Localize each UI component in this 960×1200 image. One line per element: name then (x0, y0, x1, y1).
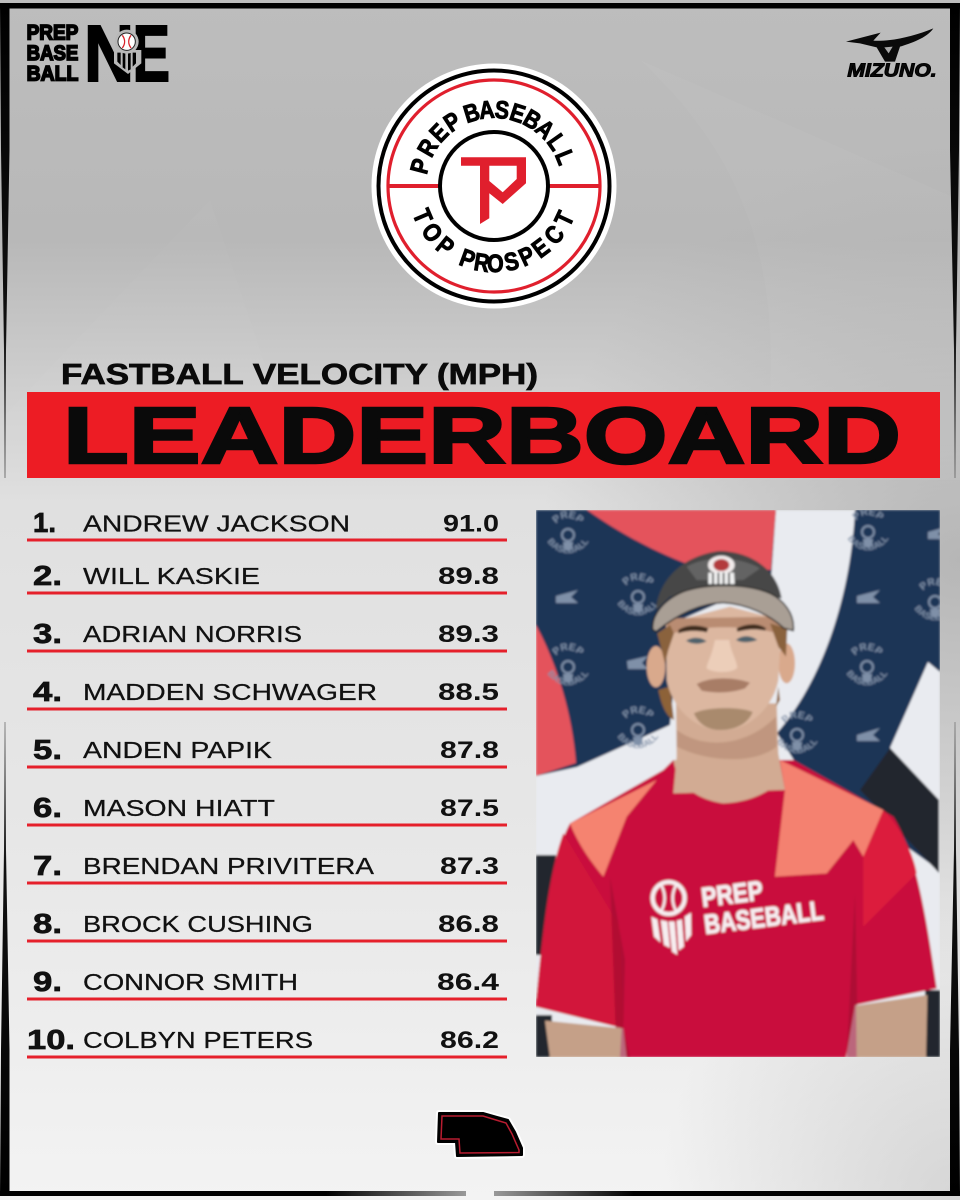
backdrop watermarks: BASEBALL (847, 534, 890, 552)
logo: Prep Baseball NE: E (133, 9, 170, 98)
row 3: 89.3 (438, 621, 499, 648)
row 4: 88.5 (438, 679, 499, 706)
row 3 (27, 618, 507, 652)
title text: LEADERBOARD (63, 391, 901, 480)
row 8: 8. (33, 908, 62, 939)
badge text: top arc: A (478, 95, 496, 124)
title banner (27, 391, 940, 480)
badge text: bottom arc: R (472, 247, 492, 277)
row 7: 7. (33, 850, 62, 881)
badge text: bottom arc: P (514, 240, 539, 272)
badge text: bottom arc: O (487, 249, 504, 278)
badge text: top arc: L (542, 129, 572, 155)
row 9 (27, 966, 507, 1000)
shirt logo: BASEBALL (702, 895, 825, 940)
row 3: ADRIAN NORRIS (83, 621, 302, 647)
badge text: bottom arc (407, 205, 580, 278)
row 1: 1. (33, 507, 56, 538)
row 6: 6. (33, 792, 62, 823)
shirt logo: PREP (700, 875, 765, 913)
row 6 (27, 792, 507, 826)
row 6: MASON HIATT (83, 795, 275, 821)
badge text: top arc: E (424, 118, 454, 148)
backdrop watermarks: BASEBALL (616, 599, 658, 617)
backdrop watermarks: BASEBALL (914, 604, 940, 622)
badge text: top arc: P (405, 156, 435, 177)
badge text: bottom arc: O (416, 218, 448, 248)
row 2: 2. (33, 560, 62, 591)
subtitle: FASTBALL VELOCITY (MPH) (61, 359, 538, 391)
arm left (545, 1021, 622, 1057)
row 9: 9. (33, 966, 62, 997)
backdrop watermarks: BASEBALL (547, 669, 590, 687)
row 4: MADDEN SCHWAGER (83, 679, 377, 705)
logo: Prep Baseball NE: BASE (27, 42, 78, 65)
badge text: top arc: E (507, 98, 529, 129)
row 8: 86.8 (438, 911, 499, 938)
logo: Prep Baseball NE (27, 9, 170, 98)
row 4 (27, 676, 507, 710)
badge text: bottom arc: P (431, 231, 460, 261)
logo: Prep Baseball NE: PREP (27, 21, 78, 44)
badge text: top arc: R (412, 134, 444, 161)
neck base (673, 760, 775, 803)
icon: Nebraska state outline (438, 1113, 522, 1156)
row 2: 89.8 (438, 563, 499, 590)
row 3: 3. (33, 618, 62, 649)
logo: Mizuno: MIZUNO. (847, 60, 937, 81)
row 1: 91.0 (443, 510, 499, 538)
badge text: top arc: S (493, 95, 511, 124)
row 7 (27, 850, 507, 884)
row 10: COLBYN PETERS (83, 1027, 313, 1053)
row 10: 86.2 (440, 1027, 499, 1054)
logo: Mizuno (846, 28, 937, 81)
backdrop watermarks: PREP (620, 572, 655, 586)
player cap (653, 551, 793, 632)
badge text: bottom arc: S (501, 246, 521, 277)
backdrop watermarks: PREP (918, 576, 940, 592)
backdrop watermarks: BASEBALL (546, 537, 590, 555)
row 6: 87.5 (440, 795, 499, 822)
row 1 (27, 507, 507, 542)
badge text: bottom arc: C (538, 220, 570, 249)
row 8 (27, 908, 507, 942)
backdrop watermarks: PREP (550, 642, 585, 656)
badge text: bottom arc: T (549, 207, 580, 231)
row 5: 5. (33, 734, 62, 765)
row 7: 87.3 (440, 853, 499, 880)
row 10: 10. (27, 1024, 75, 1055)
logo: Prep Baseball NE: BALL (27, 63, 78, 86)
badge text: top arc: B (460, 97, 483, 128)
badge text: top arc: L (550, 146, 580, 169)
logo: Prep Baseball NE: N (84, 9, 134, 98)
badge text: top arc (405, 95, 580, 177)
badge text: bottom arc: P (456, 243, 479, 274)
row 8: BROCK CUSHING (83, 911, 313, 937)
backdrop watermarks: BASEBALL (846, 669, 889, 687)
row 7: BRENDAN PRIVITERA (83, 853, 375, 879)
backdrop watermarks: PREP (852, 510, 885, 522)
row 9: CONNOR SMITH (83, 969, 298, 995)
badge text: top arc: A (530, 114, 561, 145)
row 4: 4. (33, 676, 62, 707)
player shirt (536, 760, 937, 1057)
badge monogram: TP (461, 157, 526, 224)
badge text: bottom arc: T (407, 205, 438, 228)
backdrop watermarks: PREP (550, 510, 585, 524)
row 5 (27, 734, 507, 768)
backdrop watermarks (546, 510, 940, 793)
row 5: 87.8 (440, 737, 499, 764)
row 10 (27, 1024, 507, 1058)
photo backdrop (536, 510, 940, 1057)
player photo (536, 510, 940, 1057)
badge text: top arc: B (519, 104, 546, 136)
row 2 (27, 560, 507, 594)
row 1: ANDREW JACKSON (83, 510, 350, 536)
row 9: 86.4 (437, 969, 500, 996)
badge text: bottom arc: E (526, 232, 555, 263)
backdrop watermarks: PREP (850, 642, 884, 656)
backdrop watermarks: PREP (620, 704, 655, 720)
backdrop watermarks: PREP (780, 710, 814, 724)
badge text: top arc: P (439, 106, 466, 137)
player head (647, 607, 795, 793)
shirt logo (651, 875, 825, 955)
badge: Prep Baseball Top Prospect (372, 64, 616, 308)
row 5: ANDEN PAPIK (83, 737, 273, 763)
arm right (856, 995, 927, 1057)
backdrop watermarks: BASEBALL (616, 732, 659, 750)
backdrop watermarks: BASEBALL (776, 738, 819, 755)
leaderboard list (27, 507, 507, 1058)
row 2: WILL KASKIE (83, 563, 260, 589)
